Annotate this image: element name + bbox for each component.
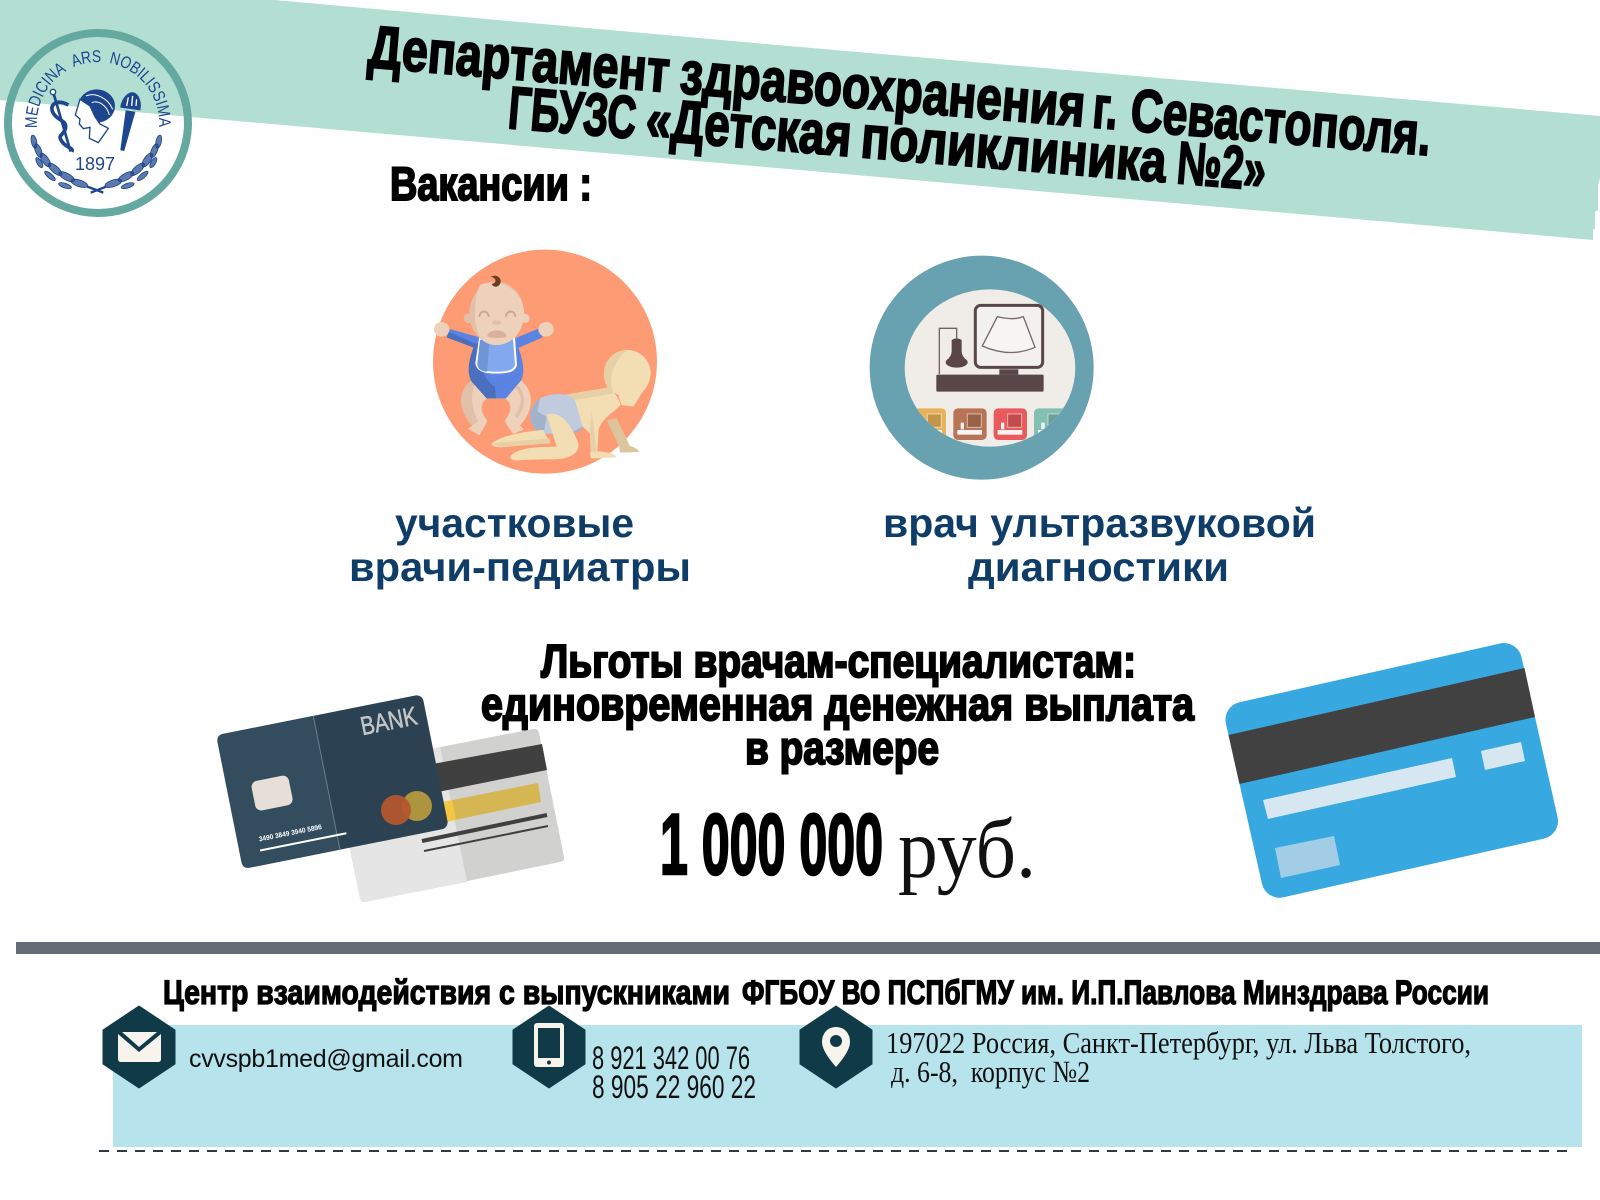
- header banner: [0, 0, 1600, 240]
- icon: phone: [513, 1006, 585, 1088]
- amount: one million rubles: 1 000 000: [660, 797, 883, 893]
- divider bar: [16, 942, 1600, 954]
- heading: benefits: в размере: [745, 722, 939, 774]
- title: «Детская: [643, 85, 854, 169]
- icon: profile head: [75, 89, 115, 143]
- heading: vacancies: Вакансии :: [390, 157, 592, 210]
- amount: one million rubles: руб.: [898, 802, 1036, 896]
- icon: laurel wreath: [30, 135, 163, 193]
- phone numbers: [592, 1040, 756, 1105]
- label: pediatricians: участковые: [395, 500, 634, 546]
- phone numbers: 8 905 22 960 22: [592, 1069, 756, 1105]
- label: pediatricians: врачи-педиатры: [349, 544, 691, 590]
- front card: 3490 3849 3940 5896: [258, 824, 323, 843]
- email address: cvvspb1med@gmail.com: [189, 1045, 463, 1073]
- icon: rod of Asclepius: [50, 89, 72, 152]
- title: г.: [1090, 73, 1121, 142]
- icon: bank cards: [216, 694, 564, 902]
- title: ГБУЗС: [506, 74, 639, 151]
- icon: babies in orange circle: [433, 250, 657, 474]
- heading: benefits: Льготы врачам-специалистам:: [541, 635, 1136, 687]
- heading: benefits: единовременная денежная выплата: [481, 678, 1194, 730]
- icon: map pin: [800, 1006, 872, 1088]
- logo: medical university seal: [4, 29, 192, 217]
- front card: BANK: [358, 700, 420, 741]
- icon: email: [103, 1006, 175, 1088]
- sitting baby: [434, 276, 554, 435]
- label: ultrasound doctor: [883, 500, 1316, 590]
- icon: blue card: [1222, 640, 1562, 901]
- postal address: 197022 Россия, Санкт-Петербург, ул. Льва Толстого,: [886, 1025, 1471, 1060]
- title: Севастополя.: [1128, 77, 1434, 168]
- icon: ultrasound machine in teal ring: [870, 256, 1094, 480]
- contact panel: [103, 1006, 1582, 1147]
- phone numbers: 8 921 342 00 76: [592, 1040, 750, 1076]
- front card: [216, 694, 449, 869]
- logo: medical university seal: MEDICINA ARS NOBILISSIMA: [25, 50, 171, 127]
- postal address: [886, 1025, 1471, 1089]
- title: здравоохранения: [678, 39, 1088, 139]
- logo: medical university seal: 1897: [75, 154, 115, 174]
- title: поликлиника: [859, 103, 1170, 195]
- footer heading: Центр взаимодействия с выпускниками: [163, 974, 730, 1012]
- title: №2»: [1175, 129, 1269, 203]
- icon: torch: [121, 93, 141, 151]
- label: pediatricians: [349, 500, 691, 590]
- heading: benefits: [481, 635, 1194, 774]
- postal address: д. 6-8, корпус №2: [891, 1054, 1090, 1089]
- title: Департамент: [366, 13, 672, 105]
- label: ultrasound doctor: врач ультразвуковой: [883, 500, 1316, 546]
- title: [366, 13, 1434, 203]
- label: ultrasound doctor: диагностики: [968, 544, 1229, 590]
- footer heading: [163, 974, 1489, 1012]
- crawling baby: [492, 350, 651, 460]
- back card: [333, 729, 564, 902]
